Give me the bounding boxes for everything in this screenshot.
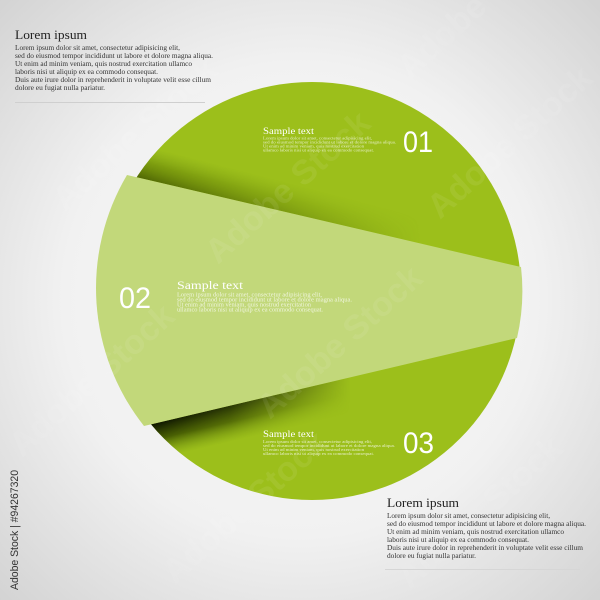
segment 03 text xyxy=(263,427,434,460)
sample heading 01: Sample text xyxy=(263,127,314,137)
paragraph: Lorem ipsum dolor sit amet, consectetur adipisicing elit, xyxy=(387,512,550,520)
sample paragraph 02 xyxy=(177,292,353,314)
paragraph: Lorem ipsum dolor sit amet, consectetur adipisicing elit, xyxy=(15,44,180,52)
text block: bottom right xyxy=(387,495,586,560)
stock id: Adobe Stock | #94267320 xyxy=(9,470,21,590)
sample paragraph 01 xyxy=(263,136,396,152)
sample paragraph 01: Ut enim ad minim veniam, quis nostrud exercitation xyxy=(263,144,365,150)
paragraph: dolore eu fugiat nulla pariatur. xyxy=(15,84,105,92)
sample heading 02: Sample text xyxy=(177,278,244,292)
number 02: 02 xyxy=(119,282,151,315)
watermark: Adobe Stock xyxy=(45,51,225,218)
watermark: Adobe Stock xyxy=(2,297,182,464)
paragraph: laboris nisi ut aliquip ex ea commodo consequat. xyxy=(387,536,529,544)
watermark: Adobe Stock xyxy=(198,104,378,271)
sample heading 03: Sample text xyxy=(263,430,314,440)
green circle xyxy=(103,82,521,500)
sample paragraph 02: sed do eiusmod tempor incididunt ut labore et dolore magna aliqua. xyxy=(177,298,353,304)
paragraph: Duis aute irure dolor in reprehenderit in voluptate velit esse cillum xyxy=(387,544,584,552)
paragraph: laboris nisi ut aliquip ex ea commodo consequat. xyxy=(15,68,158,76)
sample paragraph 02: ullamco laboris nisi ut aliquip ex ea commodo consequat. xyxy=(177,308,324,314)
sample paragraph 02: Lorem ipsum dolor sit amet, consectetur adipisicing elit, xyxy=(177,292,323,298)
number 01: 01 xyxy=(403,126,433,159)
paragraph: sed do eiusmod tempor incididunt ut labore et dolore magna aliqua. xyxy=(387,520,586,528)
sample paragraph 03 xyxy=(263,439,395,456)
paragraph: Duis aute irure dolor in reprehenderit in voluptate velit esse cillum xyxy=(15,76,212,84)
sample paragraph 03: sed do eiusmod tempor incididunt ut labore et dolore magna aliqua. xyxy=(263,443,395,448)
sample paragraph 01: sed do eiusmod tempor incididunt ut labore et dolore magna aliqua. xyxy=(263,140,396,144)
paragraph: dolore eu fugiat nulla pariatur. xyxy=(387,552,476,560)
heading: Lorem ipsum xyxy=(15,27,87,42)
paragraph: Ut enim ad minim veniam, quis nostrud exercitation ullamco xyxy=(387,528,565,536)
sample paragraph 01: ullamco laboris nisi ut aliquip ex ea commodo consequat. xyxy=(263,148,374,152)
bottom shadow xyxy=(151,380,343,450)
watermark: Adobe Stock xyxy=(250,259,430,426)
sample paragraph 01: Lorem ipsum dolor sit amet, consectetur adipisicing elit, xyxy=(263,136,372,142)
sample paragraph 03: Lorem ipsum dolor sit amet, consectetur adipisicing elit, xyxy=(263,439,372,445)
watermark: Adobe Stock xyxy=(420,59,600,226)
paragraph xyxy=(387,512,586,560)
heading: Lorem ipsum xyxy=(387,495,459,510)
sample paragraph 02: Ut enim ad minim veniam, quis nostrud exercitation xyxy=(177,302,311,308)
top shadow xyxy=(136,154,387,236)
segment 01 text xyxy=(263,126,433,159)
watermark: Adobe Stock xyxy=(390,429,570,596)
number 03: 03 xyxy=(403,427,434,460)
paragraph: Ut enim ad minim veniam, quis nostrud exercitation ullamco xyxy=(15,60,193,68)
text block: top left xyxy=(15,27,213,92)
paragraph: sed do eiusmod tempor incididunt ut labore et dolore magna aliqua. xyxy=(15,52,213,60)
sample paragraph 03: Ut enim ad minim veniam, quis nostrud exercitation xyxy=(263,447,365,453)
light middle segment xyxy=(96,175,522,426)
segment 02 text xyxy=(119,278,353,315)
watermark: Adobe Stock xyxy=(155,424,335,591)
paragraph xyxy=(15,44,213,92)
sample paragraph 03: ullamco laboris nisi ut aliquip ex ea commodo consequat. xyxy=(263,451,374,456)
